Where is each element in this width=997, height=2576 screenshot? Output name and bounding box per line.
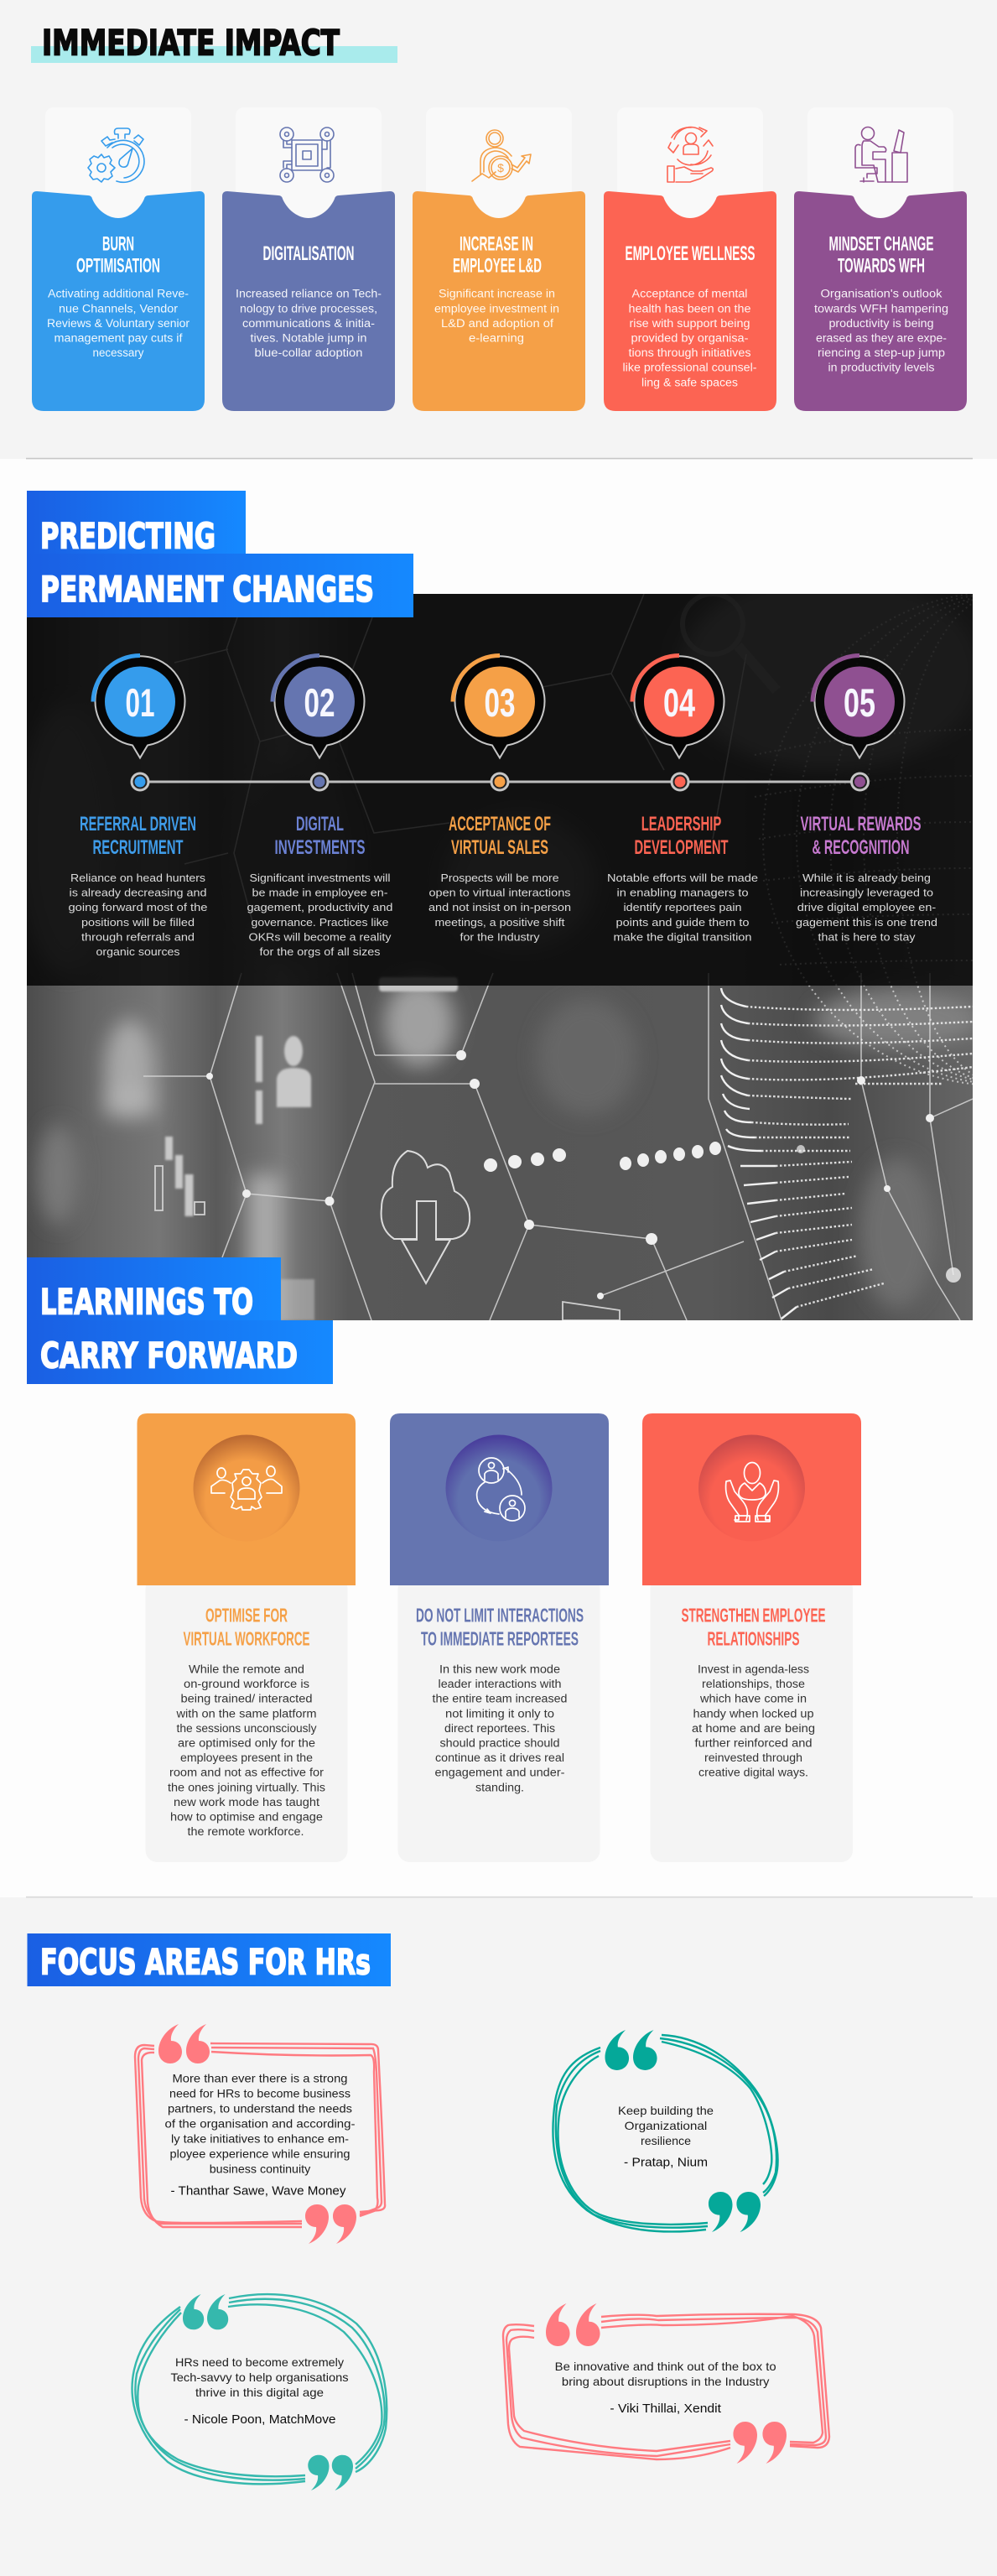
card title: EMPLOYEE WELLNESS <box>626 242 755 265</box>
pin marker 03: 03 <box>485 680 515 725</box>
card body text: necessary <box>92 346 144 359</box>
card body text <box>433 1663 567 1793</box>
section heading: learnings to carry forward: LEARNINGS TO <box>40 1282 253 1322</box>
card: increase in employee L&D: EMPLOYEE L&D <box>453 255 542 277</box>
quote 4: Viki Thillai <box>503 2303 829 2464</box>
section: immediate impact <box>31 22 967 411</box>
globe stripes <box>721 988 797 1319</box>
quote marks <box>183 2294 353 2490</box>
quote author: - Nicole Poon, MatchMove <box>184 2413 335 2427</box>
quote marks <box>546 2303 787 2464</box>
step 02: digital investments <box>247 656 392 958</box>
step body: for the Industry <box>460 930 540 943</box>
step body: OKRs will become a reality <box>248 930 392 943</box>
card body text: riencing a step-up jump <box>818 346 945 359</box>
step body: is already decreasing and <box>69 887 206 899</box>
card: strengthen employee relationships <box>642 1413 861 1862</box>
card body text: In this new work mode <box>439 1663 560 1676</box>
quote text: ly take initiatives to enhance em- <box>171 2131 349 2145</box>
step body: positions will be filled <box>81 916 195 929</box>
card: optimise for virtual workforce: VIRTUAL WORKFORCE <box>183 1628 310 1650</box>
card: mindset change towards WFH <box>794 107 967 411</box>
card body text: reinvested through <box>704 1751 802 1764</box>
step body <box>69 872 208 958</box>
icon: team with gear <box>211 1466 282 1510</box>
pin marker 04 <box>632 656 724 758</box>
quote 3: Nicole Poon <box>132 2294 387 2490</box>
card: optimise for virtual workforce <box>138 1413 356 1862</box>
section heading: learnings to carry forward: CARRY FORWARD <box>40 1335 298 1376</box>
step body: going forward most of the <box>69 901 208 913</box>
section heading: focus areas for HRs <box>27 1933 391 1986</box>
card body text: Reviews & Voluntary senior <box>47 317 190 330</box>
card body text: not limiting it only to <box>445 1707 554 1720</box>
card body text: tions through initiatives <box>629 346 751 359</box>
card body text: relationships, those <box>702 1678 805 1690</box>
quote text: Organizational <box>625 2119 707 2132</box>
card body text: the ones joining virtually. This <box>168 1781 325 1793</box>
icon: employee with coin and growth arrow: $ <box>497 161 504 174</box>
cloud download icon in photo <box>382 1151 470 1283</box>
icon: circuit chip <box>280 127 334 182</box>
card: strengthen employee relationships: RELATIONSHIPS <box>708 1628 800 1650</box>
card body text: with on the same platform <box>175 1707 317 1720</box>
card body text: further reinforced and <box>694 1736 812 1750</box>
quote text: bring about disruptions in the Industry <box>562 2375 769 2388</box>
icon: hands holding a person <box>726 1463 778 1522</box>
card body text: which have come in <box>699 1693 807 1705</box>
step body: for the orgs of all sizes <box>260 945 381 958</box>
step title: LEADERSHIP <box>641 813 721 835</box>
icon: person working at desk <box>855 127 907 182</box>
step 03: acceptance of virtual sales: VIRTUAL SALES <box>451 836 548 859</box>
quote text: ployee experience while ensuring <box>169 2147 351 2160</box>
card body text: how to optimise and engage <box>170 1810 323 1824</box>
quote text: partners, to understand the needs <box>168 2101 352 2115</box>
step body: Significant investments will <box>250 872 391 884</box>
page background middle band <box>0 459 997 1897</box>
card body text: e-learning <box>469 332 524 344</box>
quote frame <box>553 2035 778 2231</box>
step body: identify reportees pain <box>624 901 741 913</box>
card body text: communications & initia- <box>242 317 375 330</box>
section heading: predicting permanent changes: PREDICTING <box>40 515 215 557</box>
pin marker 03 <box>453 656 545 758</box>
card body text: room and not as effective for <box>169 1767 325 1779</box>
card body text: in productivity levels <box>828 362 935 374</box>
card body text: should practice should <box>439 1736 560 1750</box>
quote marks <box>158 2024 356 2244</box>
step 04: leadership development: DEVELOPMENT <box>634 836 729 859</box>
card body text <box>814 288 948 374</box>
step title: REFERRAL DRIVEN <box>80 813 196 835</box>
card title: BURN <box>102 233 134 255</box>
card body text: at home and are being <box>692 1722 815 1735</box>
quote text: More than ever there is a strong <box>173 2071 347 2084</box>
card: employee wellness <box>604 107 776 411</box>
step body: Notable efforts will be made <box>607 872 758 884</box>
card body text <box>47 288 190 359</box>
card body text: nue Channels, Vendor <box>59 302 179 315</box>
section heading: focus areas for HRs: FOCUS AREAS FOR HRs <box>40 1941 371 1983</box>
card body text <box>622 288 756 388</box>
pin marker 02: 02 <box>304 680 335 725</box>
card body text: standing. <box>475 1781 524 1793</box>
card body text: Increased reliance on Tech- <box>236 288 382 300</box>
card body text: productivity is being <box>828 317 934 330</box>
step body <box>428 872 571 943</box>
icon: caring hand with person <box>667 127 713 182</box>
step body: Prospects will be more <box>441 872 558 884</box>
step body: increasingly leveraged to <box>800 887 933 899</box>
step body: gagement, productivity and <box>247 901 392 913</box>
step 01: referral driven recruitment: RECRUITMENT <box>92 836 184 859</box>
card body text: on-ground workforce is <box>184 1678 309 1690</box>
card title: OPTIMISE FOR <box>205 1605 288 1626</box>
step body <box>796 872 937 943</box>
card body text: the sessions unconsciously <box>176 1722 317 1735</box>
card body text: L&D and adoption of <box>441 317 553 330</box>
card: burn optimisation <box>32 107 205 411</box>
title highlight bar <box>31 46 397 63</box>
card body text <box>168 1663 325 1838</box>
quote marks <box>605 2030 761 2232</box>
card body text: employee investment in <box>434 302 559 315</box>
pin marker 04: 04 <box>663 680 695 725</box>
card body text: tives. Notable jump in <box>250 332 367 344</box>
dotted white beads <box>206 1050 961 1299</box>
quote frame <box>135 2043 385 2227</box>
quote author: - Viki Thillai, Xendit <box>610 2402 721 2416</box>
card body text <box>434 288 559 344</box>
quote 1: Thanthar Sawe <box>135 2024 385 2244</box>
icon: employee with coin and growth arrow <box>472 130 531 181</box>
card body text: leader interactions with <box>438 1678 562 1690</box>
quote text <box>555 2360 776 2388</box>
step body: gagement this is one trend <box>796 916 937 929</box>
step body: drive digital employee en- <box>797 901 936 913</box>
title: immediate impact: IMMEDIATE IMPACT <box>42 22 340 64</box>
step body: meetings, a positive shift <box>434 916 565 929</box>
step 02: digital investments: INVESTMENTS <box>275 836 366 859</box>
step 01: referral driven recruitment <box>69 656 208 958</box>
icon: two people in a cycle <box>477 1458 525 1521</box>
card body text: health has been on the <box>629 302 751 315</box>
quote text <box>171 2355 349 2399</box>
card title: INCREASE IN <box>460 233 533 255</box>
step 03: acceptance of virtual sales <box>428 656 571 943</box>
step body: be made in employee en- <box>252 887 387 899</box>
quote author: - Pratap, Nium <box>624 2157 708 2170</box>
quote text: Be innovative and think out of the box to <box>555 2360 776 2373</box>
card body text: Significant increase in <box>439 288 555 300</box>
card body text: creative digital ways. <box>698 1767 808 1779</box>
section heading: predicting permanent changes <box>27 491 413 617</box>
step body <box>607 872 758 943</box>
icon: stopwatch and gear <box>88 128 144 182</box>
step 04: leadership development <box>607 656 758 943</box>
step title: VIRTUAL REWARDS <box>800 813 921 835</box>
pin marker 02 <box>273 656 364 758</box>
card body text: being trained/ interacted <box>181 1693 312 1705</box>
section heading: predicting permanent changes: PERMANENT CHANGES <box>40 569 374 610</box>
card title: DIGITALISATION <box>263 242 354 265</box>
quote frame <box>132 2294 387 2484</box>
pin marker 05 <box>813 656 904 758</box>
step title: ACCEPTANCE OF <box>449 813 551 835</box>
step body <box>247 872 392 958</box>
card: mindset change towards WFH: TOWARDS WFH <box>838 255 925 277</box>
quote text: of the organisation and according- <box>164 2116 356 2130</box>
step body: While it is already being <box>802 872 931 884</box>
timeline: five predictions <box>69 656 937 958</box>
step body: make the digital transition <box>614 930 751 943</box>
step body: Reliance on head hunters <box>70 872 206 884</box>
quote text <box>164 2071 356 2175</box>
card body text: ling & safe spaces <box>641 376 738 388</box>
quote text: need for HRs to become business <box>169 2086 351 2100</box>
step 05: virtual rewards and recognition <box>796 656 937 943</box>
section heading: learnings to carry forward <box>27 1257 333 1384</box>
card body text: Invest in agenda-less <box>698 1663 809 1676</box>
quote text: HRs need to become extremely <box>175 2355 344 2369</box>
card body text: direct reportees. This <box>444 1722 555 1735</box>
step body: open to virtual interactions <box>429 887 571 899</box>
card body text: management pay cuts if <box>54 332 183 344</box>
card: digitalisation <box>222 107 395 411</box>
card body text: nology to drive processes, <box>240 302 377 315</box>
card body text: handy when locked up <box>693 1707 813 1720</box>
pin marker 01: 01 <box>126 680 154 725</box>
card body text: provided by organisa- <box>631 332 748 344</box>
card body text: blue-collar adoption <box>255 346 362 359</box>
card body text: Organisation's outlook <box>820 288 942 300</box>
card: increase in employee L&D <box>413 107 585 411</box>
step body: points and guide them to <box>615 916 750 929</box>
card body text: continue as it drives real <box>435 1751 564 1764</box>
card body text: new work mode has taught <box>174 1796 319 1808</box>
step body: governance. Practices like <box>252 916 389 929</box>
quote frame <box>503 2314 829 2459</box>
globe dots <box>755 594 973 1085</box>
card body text: employees present in the <box>180 1751 313 1764</box>
step title: DIGITAL <box>296 813 344 835</box>
card body text: towards WFH hampering <box>814 302 948 315</box>
quote 2: Pratap <box>553 2030 778 2232</box>
dark overlay panel on photo <box>27 594 973 986</box>
quote text: resilience <box>641 2134 691 2147</box>
card body text: rise with support being <box>629 317 750 330</box>
quote text: business continuity <box>210 2162 310 2175</box>
card body text <box>692 1663 815 1779</box>
card: burn optimisation: OPTIMISATION <box>76 255 160 277</box>
magnifier in photo <box>680 594 726 637</box>
quote text: Tech-savvy to help organisations <box>171 2370 349 2384</box>
quote text: Keep building the <box>618 2104 714 2117</box>
step body: organic sources <box>96 945 180 958</box>
quote author: - Thanthar Sawe, Wave Money <box>171 2185 346 2199</box>
step body: and not insist on in-person <box>428 901 571 913</box>
step body: that is here to stay <box>818 930 916 943</box>
card body text: like professional counsel- <box>622 362 756 374</box>
card title: DO NOT LIMIT INTERACTIONS <box>416 1605 584 1626</box>
card body text: Acceptance of mental <box>632 288 748 300</box>
card body text: engagement and under- <box>434 1767 565 1779</box>
card body text: erased as they are expe- <box>816 332 947 344</box>
card body text: the entire team increased <box>433 1693 567 1705</box>
background photo: digital network collage <box>17 570 997 1334</box>
step body: in enabling managers to <box>617 887 748 899</box>
card title: STRENGTHEN EMPLOYEE <box>681 1605 825 1626</box>
quote text <box>618 2104 714 2147</box>
card body text: Activating additional Reve- <box>48 288 189 300</box>
card: do not limit interactions: TO IMMEDIATE REPORTEES <box>421 1628 579 1650</box>
person and candles in photo <box>165 1036 314 1320</box>
card body text <box>236 288 382 359</box>
card: do not limit interactions <box>390 1413 609 1862</box>
step 05: virtual rewards and recognition: & RECOGNITION <box>812 836 909 859</box>
card body text: are optimised only for the <box>178 1736 315 1750</box>
pin marker 01 <box>93 656 185 758</box>
step body: through referrals and <box>81 930 195 943</box>
card body text: the remote workforce. <box>188 1825 304 1838</box>
pin marker 05: 05 <box>844 680 875 725</box>
card body text: While the remote and <box>189 1663 304 1676</box>
quote text: thrive in this digital age <box>195 2386 324 2399</box>
